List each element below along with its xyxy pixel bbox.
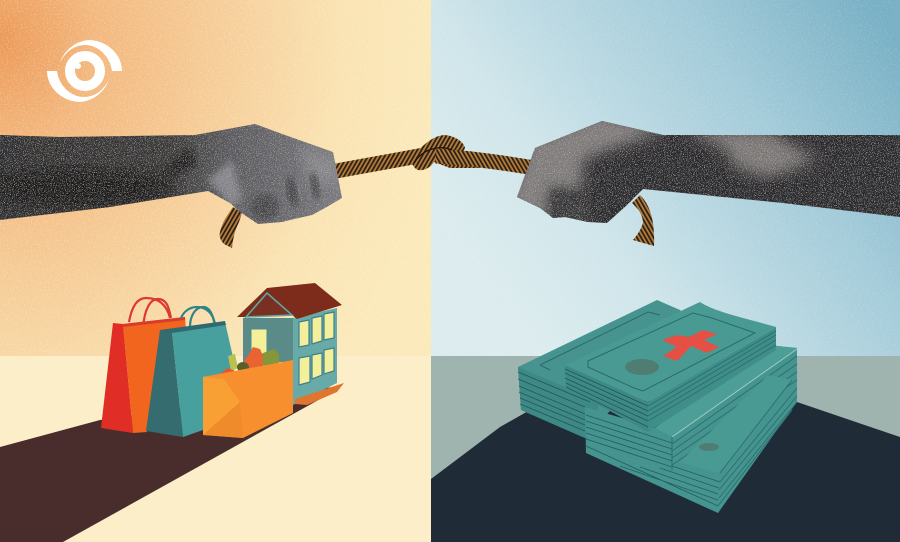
icon: orange grocery bag [203, 360, 293, 438]
panel: left warm background [0, 0, 431, 542]
medical cross [662, 330, 719, 361]
left ground shadow [0, 386, 340, 542]
icon: house [237, 283, 344, 405]
icon: groceries [217, 347, 279, 380]
rope: left tail [220, 207, 242, 248]
logo: eye emblem [47, 40, 122, 102]
top stack [565, 302, 776, 432]
back left stack [518, 300, 700, 438]
lower bill seal [699, 443, 719, 451]
bill seal [625, 359, 659, 375]
lower right stack [585, 345, 797, 513]
icon: teal shopping bag [146, 307, 234, 437]
rope: main span with knot [336, 135, 534, 171]
rope: right tail [632, 195, 654, 246]
icon: stack of medical cash [518, 300, 797, 513]
arm: right fist pulling [517, 121, 900, 223]
right ground shadow [431, 400, 900, 542]
icon: red shopping bag [101, 298, 186, 433]
panel: right cool background [431, 0, 900, 542]
arm: left fist pulling [0, 124, 342, 224]
